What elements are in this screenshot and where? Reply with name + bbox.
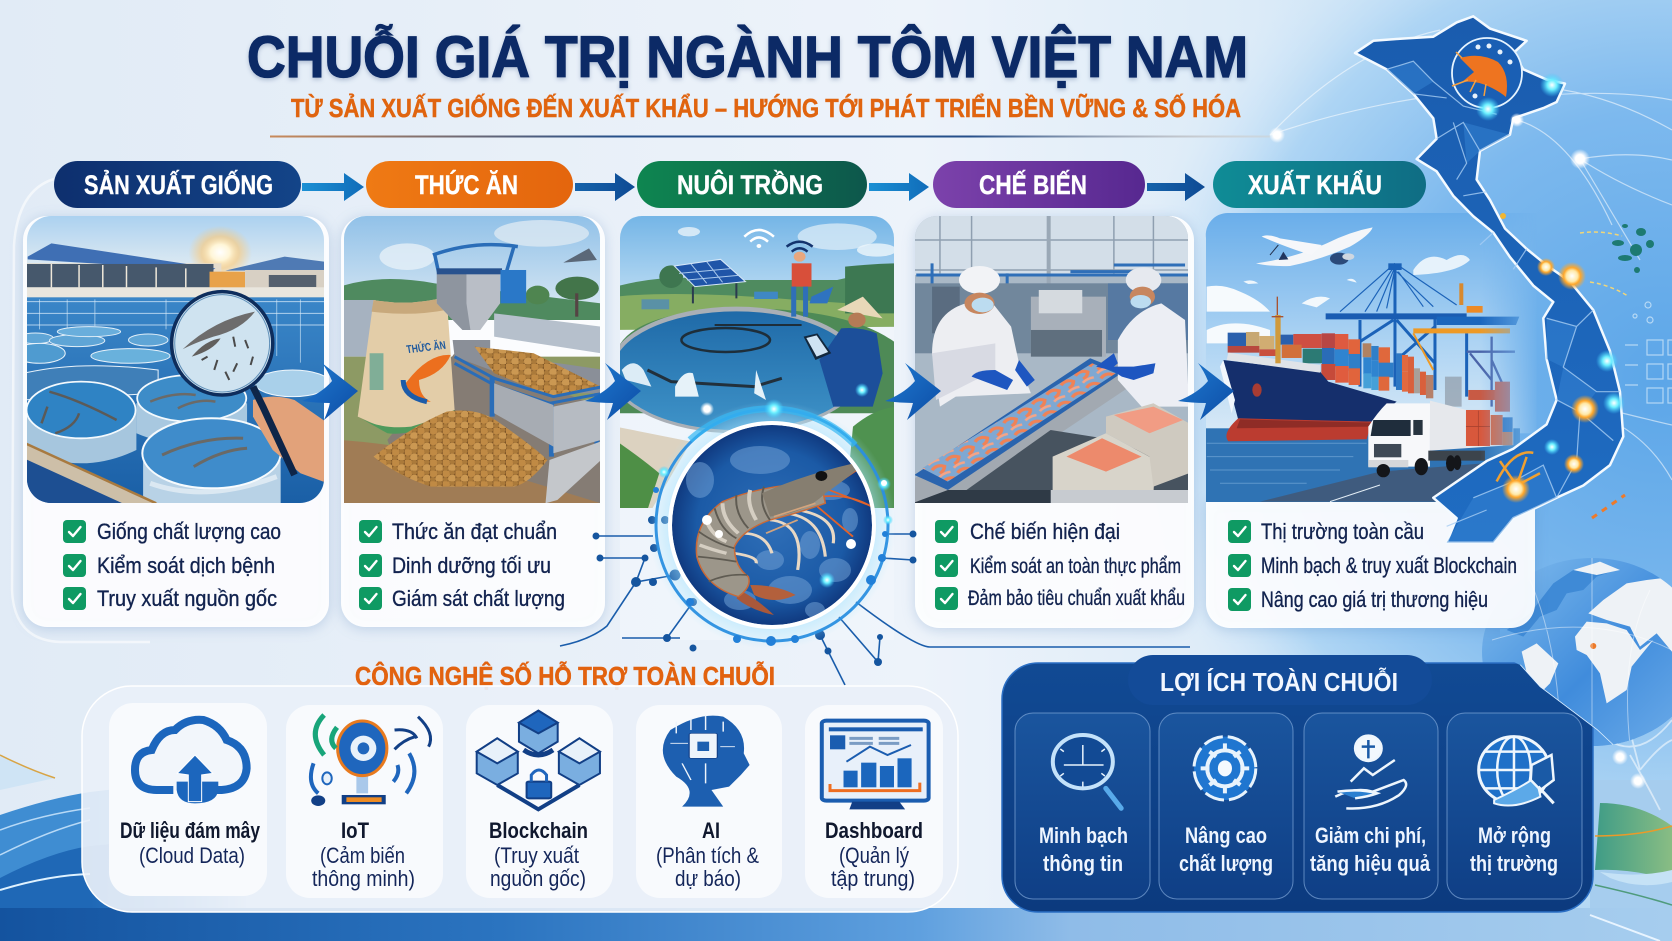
tech card: dashboard: (Quản lý [839, 843, 909, 868]
chain frame [12, 179, 150, 642]
tech card: AI: AI [702, 818, 720, 843]
tech card: cloud data [109, 703, 267, 896]
card: nuôi trồng [620, 216, 894, 508]
shrimp medallion [1452, 38, 1522, 108]
benefit: market [1447, 713, 1582, 899]
checklist [63, 519, 281, 611]
card: thức ăn [340, 213, 605, 627]
checklist: Truy xuất nguồn gốc [97, 586, 277, 611]
card: chế biến [912, 215, 1194, 628]
arrow [869, 173, 929, 201]
pill: nuôi trồng [637, 161, 867, 208]
panel: digital technology [82, 686, 958, 912]
checklist: Thức ăn đạt chuẩn [392, 519, 557, 544]
checklist: Thị trường toàn cầu [1261, 519, 1424, 544]
tech card: IoT [286, 705, 443, 898]
pills and connector arrows [54, 161, 1426, 208]
illustration: ship, plane, truck and port [1203, 210, 1537, 503]
checklist: Đảm bảo tiêu chuẩn xuất khẩu [968, 587, 1185, 610]
benefit: transparency: thông tin [1043, 851, 1123, 876]
pill: chế biến: CHẾ BIẾN [979, 169, 1087, 200]
tech card: cloud data: (Cloud Data) [139, 843, 245, 868]
tech card: IoT: IoT [341, 818, 369, 843]
tech card: cloud data: Dữ liệu đám mây [120, 818, 261, 843]
checklist [1228, 519, 1517, 612]
checklist: Nâng cao giá trị thương hiệu [1261, 587, 1488, 612]
benefits heading [1128, 655, 1432, 705]
pill: thức ăn: THỨC ĂN [415, 169, 518, 200]
pill: xuất khẩu: XUẤT KHẨU [1248, 169, 1382, 200]
checklist: Dinh dưỡng tối ưu [392, 553, 551, 578]
benefit: cost: Giảm chi phí, [1315, 823, 1426, 848]
checklist: Chế biến hiện đại [970, 519, 1120, 544]
pill: nuôi trồng: NUÔI TRỒNG [677, 169, 823, 200]
benefit: cost [1304, 713, 1438, 899]
card: sản xuất giống [14, 213, 332, 627]
arrow [575, 173, 635, 201]
title: CHUỖI GIÁ TRỊ NGÀNH TÔM VIỆT NAM [247, 25, 1248, 90]
checklist: Giám sát chất lượng [392, 586, 565, 611]
benefit: quality: chất lượng [1179, 851, 1273, 876]
checklist: Giống chất lượng cao [97, 519, 281, 544]
arrow [1147, 173, 1205, 201]
tech card: AI: dự báo) [675, 866, 741, 891]
tech card: dashboard: Dashboard [825, 818, 923, 843]
tech card: blockchain [466, 705, 613, 898]
tech card: AI [636, 705, 782, 898]
map of Vietnam [1269, 16, 1672, 789]
tech card: blockchain: (Truy xuất [494, 843, 579, 868]
benefit: quality: Nâng cao [1185, 823, 1267, 848]
section heading: digital technology: CÔNG NGHỆ SỐ HỖ TRỢ TOÀN CHUỖI [355, 661, 775, 691]
benefit: transparency [1015, 713, 1150, 899]
network lines background [1270, 30, 1672, 810]
panel: chain benefits [1002, 655, 1593, 912]
orb nodes [658, 383, 893, 588]
shrimp orb and circuit [560, 383, 1190, 685]
illustration: feed bag and hopper [340, 213, 605, 503]
illustration: feed bag and hopper: THỨC ĂN [405, 338, 447, 356]
benefits heading: LỢI ÍCH TOÀN CHUỖI [1160, 667, 1398, 697]
card: xuất khẩu [1203, 210, 1537, 628]
checklist [359, 519, 565, 611]
tech card: dashboard: tập trung) [831, 866, 915, 891]
pill: sản xuất giống [54, 161, 301, 208]
islands [1580, 224, 1654, 518]
illustration: hatchery tanks and magnifier [14, 213, 332, 504]
tech card: IoT: (Cảm biến [320, 843, 405, 868]
tech card: dashboard [805, 705, 943, 898]
title rule [270, 136, 1270, 138]
benefit: quality [1159, 713, 1293, 899]
benefit: market: Mở rộng [1478, 823, 1551, 848]
pill: sản xuất giống: SẢN XUẤT GIỐNG [84, 168, 273, 200]
tech card: IoT: thông minh) [312, 866, 415, 891]
tech card: AI: (Phân tích & [656, 843, 759, 868]
arrow [302, 173, 364, 201]
pill: xuất khẩu [1213, 161, 1426, 208]
globe corner over benefits panel [1500, 629, 1672, 745]
tech card: blockchain: nguồn gốc) [490, 866, 586, 891]
checklist: Kiểm soát dịch bệnh [97, 553, 275, 578]
tech card: blockchain: Blockchain [489, 818, 588, 843]
benefit: transparency: Minh bạch [1039, 823, 1128, 848]
benefit: cost: tăng hiệu quả [1310, 851, 1431, 876]
subtitle: TỪ SẢN XUẤT GIỐNG ĐẾN XUẤT KHẨU – HƯỚNG TỚI PHÁT TRIỂN BỀN VỮNG & SỐ HÓA [291, 93, 1241, 123]
illustration: processing line [912, 215, 1193, 505]
checklist: Minh bạch & truy xuất Blockchain [1261, 553, 1517, 578]
data grid [1625, 302, 1672, 403]
chevron arrows between cards [302, 363, 1234, 420]
pill: thức ăn [366, 161, 573, 208]
globe [1470, 550, 1672, 750]
checklist [935, 519, 1185, 610]
shrimp body [696, 460, 877, 615]
circuit lines [560, 534, 1190, 685]
circuit nodes [592, 516, 916, 666]
pill: chế biến [933, 161, 1145, 208]
benefit: market: thị trường [1470, 851, 1558, 876]
checklist: Kiểm soát an toàn thực phẩm [970, 555, 1181, 578]
illustration: smart pond [609, 213, 900, 510]
map nodes [1269, 73, 1646, 789]
